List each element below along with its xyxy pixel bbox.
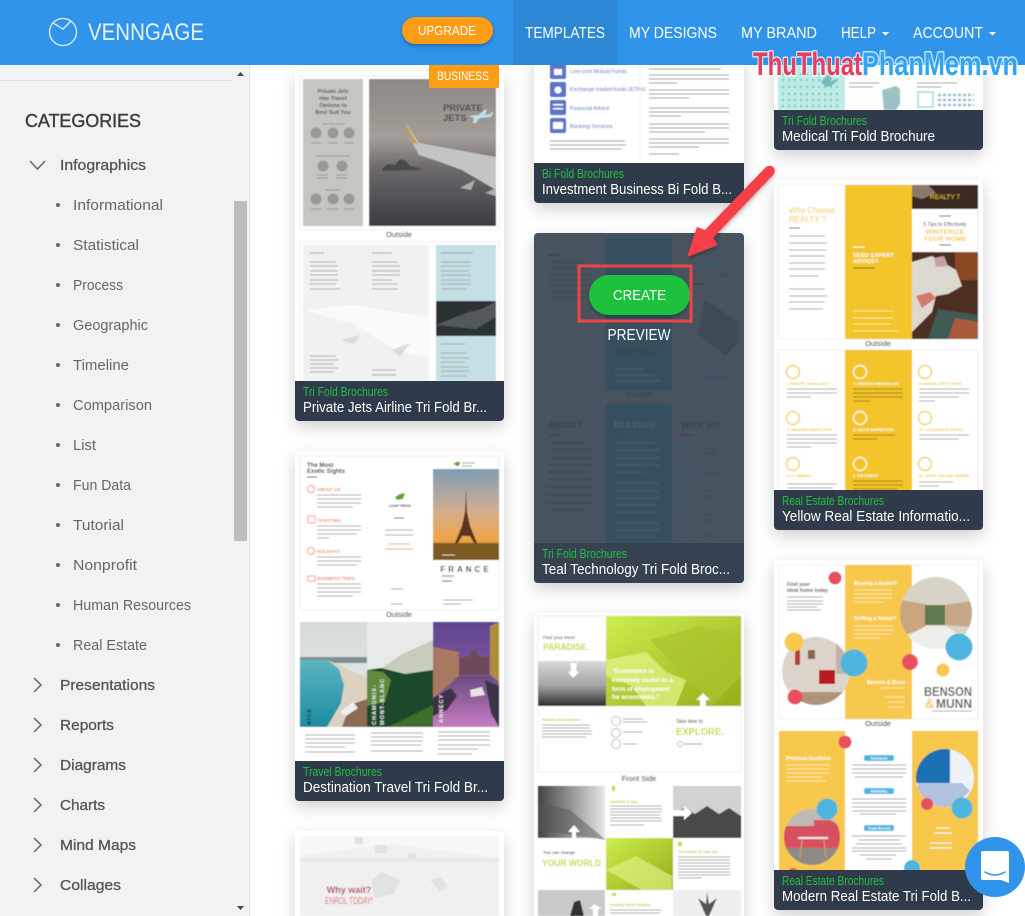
subcategory list: Fun Data [73, 477, 132, 494]
card: Teal Technology Tri Fold (hover state): MISSION [614, 420, 656, 430]
card: Private Jets Airline Tri Fold: Private Jets Airline Tri Fold Br... [303, 400, 487, 416]
card: green economics tri fold: Keeping Good Company [610, 903, 651, 907]
card: Yellow Real Estate: 5. VALVE INSPECTION [853, 428, 894, 432]
card: Investment Business Bi Fold [534, 55, 744, 203]
card: Teal Technology Tri Fold (hover state): SOLUTIONS [688, 273, 730, 279]
subcategory list: Informational [73, 197, 163, 214]
subcategory list: List [73, 437, 97, 454]
subcategory list: Timeline [73, 357, 129, 374]
card: Destination Travel Tri Fold: BUSINESS TRIPS [317, 576, 355, 581]
card: green economics tri fold: for economists.” [612, 695, 660, 701]
card: Modern Real Estate: Real Estate Brochures [782, 874, 884, 888]
card: green economics tri fold: Front Side [622, 774, 656, 783]
collapsed categories: Diagrams [60, 757, 126, 774]
card: Medical Tri Fold: Medical Tri Fold Brochure [782, 129, 935, 145]
navigation: HELP [841, 25, 876, 42]
navigation [525, 25, 996, 42]
card: Teal Technology Tri Fold (hover state): ABOUT [548, 420, 583, 430]
card: Yellow Real Estate: Outside [865, 339, 891, 348]
card: Yellow Real Estate: REALTY ? [789, 215, 827, 224]
card: Yellow Real Estate: 5 Tips to Effectively [924, 222, 967, 228]
card: Destination Travel Tri Fold [295, 451, 504, 801]
card: Modern Real Estate: Track Record [868, 826, 890, 830]
navigation: MY DESIGNS [629, 25, 717, 42]
card: green economics tri fold: “Economics is [612, 669, 654, 675]
card: Destination Travel Tri Fold: Outside [386, 610, 412, 619]
card: Teal Technology Tri Fold (hover state): CONTACT [616, 346, 662, 356]
card: Yellow Real Estate: ADVICE? [853, 259, 879, 265]
card: Modern Real Estate: & [925, 696, 934, 711]
card: Destination Travel Tri Fold: The Most [307, 463, 333, 469]
button: CREATE: CREATE [613, 287, 666, 304]
card: Yellow Real Estate: 10. CLEARANCE ZONES [919, 428, 964, 432]
button: UPGRADE [402, 17, 493, 44]
logo wordmark: VENNGAGE [88, 19, 204, 46]
card: Destination Travel Tri Fold: CHAMONIX- [372, 684, 378, 725]
collapsed categories: Collages [60, 877, 121, 894]
card: Destination Travel Tri Fold: FRANCE [440, 565, 492, 574]
card: Destination Travel Tri Fold: NICE [307, 708, 313, 725]
card: Yellow Real Estate: YOUR HOME [924, 236, 967, 243]
card: Modern Real Estate: BENSON [924, 684, 972, 699]
category: Infographics (open): Infographics [60, 157, 146, 174]
subcategory list: Comparison [73, 397, 152, 414]
card: Modern Real Estate: Premium locations [786, 756, 831, 762]
card: Modern Real Estate: Teamwork [870, 756, 888, 760]
card: Modern Real Estate: ideal home today [787, 588, 828, 594]
card: Yellow Real Estate: Real Estate Brochures [782, 494, 884, 508]
column 3 brochure cards [774, 45, 983, 910]
card: Investment Business Bi Fold: Financial Advice [570, 106, 610, 112]
subcategory list: Process [73, 277, 123, 294]
card: Modern Real Estate: Find your [787, 582, 810, 588]
card: Modern Real Estate: Modern Real Estate Tri Fold B... [782, 889, 971, 905]
card: green economics tri fold: extremely useful as a [612, 678, 673, 684]
card: Private Jets Airline Tri Fold: JETS [443, 113, 467, 124]
card: green economics tri fold: Paradise Development [542, 718, 581, 722]
card: Teal Technology Tri Fold (hover state): Outside [626, 390, 652, 399]
subcategory list: Geographic [73, 317, 148, 334]
card: Teal Technology Tri Fold (hover state) [534, 233, 744, 583]
card: green economics tri fold: You can change [543, 850, 576, 855]
card: Private Jets Airline Tri Fold: Has Travel [319, 96, 347, 102]
card: Destination Travel Tri Fold: LEAP FROG [389, 504, 411, 508]
card: Medical Tri Fold [774, 45, 983, 150]
card: Teal Technology Tri Fold (hover state): NEXUS [686, 260, 724, 272]
collapsed categories: Mind Maps [60, 837, 136, 854]
card: Destination Travel Tri Fold: TICKETING [317, 518, 342, 523]
card: green economics tri fold: YOUR WORLD [542, 858, 601, 869]
column 1 brochure cards [295, 65, 504, 916]
card: Modern Real Estate: Outside [865, 719, 891, 728]
card: green economics tri fold: EXPLORE. [676, 726, 724, 738]
button: UPGRADE: UPGRADE [418, 23, 476, 38]
card: Yellow Real Estate: 3. PLUMBING [787, 474, 812, 478]
card: Yellow Real Estate: 9. SMOKE DETECTORS [919, 382, 962, 386]
card: Private Jets Airline Tri Fold: Options to [319, 103, 347, 109]
card: Modern Real Estate [774, 560, 983, 910]
card: enrol today (faded): ENROL TODAY! [325, 896, 373, 907]
card: Yellow Real Estate: 4. KEEPING HEATING ON [853, 382, 899, 386]
card: Private Jets Airline Tri Fold [295, 71, 504, 421]
card: Modern Real Estate: Selling a home? [854, 616, 897, 622]
badge: BUSINESS: BUSINESS [437, 69, 489, 83]
card: Modern Real Estate: Buying a home? [854, 581, 897, 587]
link: PREVIEW: PREVIEW [608, 327, 671, 344]
card: Yellow Real Estate: WINTERIZE [926, 229, 965, 236]
card: green economics tri fold [534, 613, 744, 916]
chat button [965, 837, 1025, 897]
card: green economics tri fold: PARADISE. [543, 642, 589, 653]
watermark: ThuThuatPhanMem.vn [753, 46, 1018, 82]
subcategory list: Statistical [73, 237, 139, 254]
card: Yellow Real Estate [774, 180, 983, 530]
card: Yellow Real Estate: 6. ICE CHECK [853, 474, 878, 478]
column 2 brochure cards [534, 55, 775, 916]
collapsed categories: Presentations [60, 677, 155, 694]
badge: BUSINESS [429, 65, 499, 88]
card: green economics tri fold: Fine Ability To Help You [678, 850, 718, 854]
card: Modern Real Estate: MUNN [936, 696, 972, 711]
card: green economics tri fold: Find your inner [543, 635, 575, 641]
card: Private Jets Airline Tri Fold: Tri Fold Brochures [303, 385, 388, 399]
card: Teal Technology Tri Fold (hover state): Tri Fold Brochures [542, 547, 627, 561]
card: Destination Travel Tri Fold: Travel Brochures [303, 765, 382, 779]
card: Destination Travel Tri Fold: HOLIDAYS [317, 549, 340, 554]
card: Yellow Real Estate: 2. HEATING INSPECTION [787, 428, 833, 432]
card: Investment Business Bi Fold: Banking Services [570, 124, 613, 130]
card: Private Jets Airline Tri Fold: Outside [386, 230, 412, 239]
card: Yellow Real Estate: NEED EXPERT [853, 253, 894, 259]
card: Teal Technology Tri Fold (hover state): Teal Technology Tri Fold Broc... [542, 562, 730, 578]
subcategory list: Tutorial [73, 517, 124, 534]
card: Yellow Real Estate: Yellow Real Estate Informatio... [782, 509, 970, 525]
card: Private Jets Airline Tri Fold: Private Jets [318, 89, 348, 95]
collapsed categories: Charts [60, 797, 105, 814]
card: green economics tri fold: Take time to [676, 719, 703, 725]
navigation: ACCOUNT [913, 25, 983, 42]
collapsed categories [34, 677, 155, 894]
heading: categories: CATEGORIES [25, 111, 142, 131]
card: green economics tri fold: form of employment [612, 687, 670, 693]
subcategory list: Real Estate [73, 637, 147, 654]
card: Destination Travel Tri Fold: ANNECY [439, 694, 445, 723]
card: Destination Travel Tri Fold: Destination Travel Tri Fold Br... [303, 780, 488, 796]
arrow [687, 166, 775, 257]
watermark: ThuThuatPhanMem.vn: ThuThuat [753, 46, 862, 82]
card: Yellow Real Estate: 1.SHOVEL REGULARLY [787, 382, 831, 386]
navigation: MY BRAND [741, 25, 817, 42]
subcategory list: Nonprofit [73, 557, 138, 574]
card: Modern Real Estate: Reliability [871, 790, 887, 794]
subcategory list: Human Resources [73, 597, 191, 614]
subcategory list [56, 197, 191, 654]
card: Private Jets Airline Tri Fold: Best Suit You [315, 110, 351, 116]
button: CREATE [589, 275, 690, 315]
card: Destination Travel Tri Fold: ABOUT US [317, 487, 340, 492]
logo icon [50, 18, 76, 46]
navigation: TEMPLATES [525, 25, 605, 42]
card: Investment Business Bi Fold: Low-cost Mutual Funds [570, 69, 627, 75]
card: Investment Business Bi Fold: Investment Business Bi Fold B... [542, 182, 732, 198]
sidebar [0, 65, 250, 916]
card: Investment Business Bi Fold: Exchange-traded funds (ETFs) [570, 87, 645, 93]
collapsed categories: Reports [60, 717, 114, 734]
highlight box [579, 266, 691, 321]
card: Yellow Real Estate: REALTY 7 [930, 194, 960, 201]
card: Destination Travel Tri Fold: Exotic Sights [307, 469, 346, 475]
card: Investment Business Bi Fold: Bi Fold Brochures [542, 167, 624, 181]
card: Medical Tri Fold: Tri Fold Brochures [782, 114, 867, 128]
card: enrol today (faded): Why wait? [327, 885, 371, 895]
card: enrol today (faded) [295, 831, 504, 916]
card: Modern Real Estate: Benson & Munn [867, 680, 905, 686]
card: Teal Technology Tri Fold (hover state): WHY US [681, 420, 720, 430]
scrollbar [234, 72, 247, 910]
card: Yellow Real Estate: 11. AVOID FALLING DEBRIS [919, 474, 970, 478]
card: Private Jets Airline Tri Fold: PRIVATE [443, 103, 483, 114]
card: Yellow Real Estate: Why Choose [789, 206, 835, 215]
card: green economics tri fold: Optimism is Key [610, 800, 637, 804]
header bar [0, 0, 1025, 65]
card: Destination Travel Tri Fold: MONT-BLANC [380, 678, 386, 725]
